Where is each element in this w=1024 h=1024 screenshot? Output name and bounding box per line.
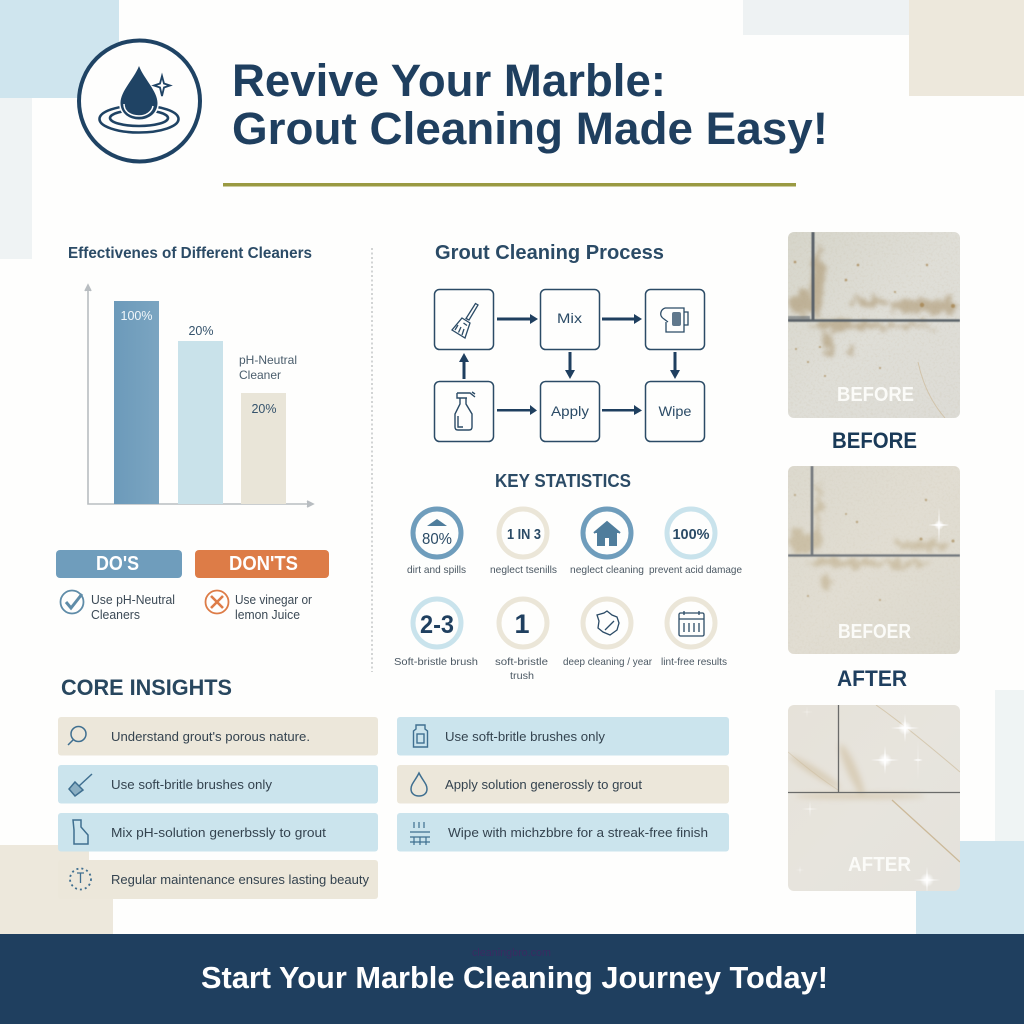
insight: soft brushes bbox=[397, 717, 729, 756]
insight: apply solution bbox=[397, 765, 729, 804]
insight: soft brushes: Use soft-britle brushes only bbox=[111, 777, 273, 792]
insight: mix solution: Mix pH-solution generbssly to grout bbox=[111, 825, 326, 840]
heading: grout cleaning process: Grout Cleaning Process bbox=[435, 242, 664, 264]
stat: sponge icon, deep cleaning per year: deep cleaning / year bbox=[563, 656, 652, 668]
stat: 2-3 soft-bristle brush: 2-3 bbox=[420, 611, 454, 639]
stat: 1 soft-bristle trush: soft-bristle bbox=[495, 656, 548, 668]
step: brush bbox=[434, 290, 494, 350]
call to action: Start Your Marble Cleaning Journey Today! bbox=[201, 960, 828, 995]
step: Mix bbox=[540, 290, 600, 350]
insight: mix solution bbox=[58, 813, 378, 852]
bar: pH-Neutral Cleaner 20%: pH-Neutral bbox=[239, 353, 297, 367]
insight: regular maintenance bbox=[58, 860, 378, 899]
icon: check bbox=[60, 590, 84, 614]
source url: cleaningbro.com bbox=[472, 947, 551, 959]
bar: 100% bbox=[114, 301, 159, 504]
title bbox=[232, 55, 828, 154]
icon: cross bbox=[206, 590, 228, 614]
header logo: water drop with sparkle bbox=[79, 40, 200, 162]
title underline bbox=[223, 183, 796, 186]
bar chart: effectiveness of cleaners bbox=[68, 245, 313, 507]
heading: key statistics: KEY STATISTICS bbox=[495, 471, 631, 491]
stat: 80% dirt and spills: 80% bbox=[422, 531, 452, 548]
step: spray bottle bbox=[434, 382, 494, 442]
step: Wipe: Wipe bbox=[658, 403, 692, 419]
heading: after: AFTER bbox=[837, 666, 907, 691]
don't text: lemon Juice bbox=[235, 608, 300, 622]
process flow diagram bbox=[434, 290, 704, 442]
bar: 100%: 100% bbox=[121, 309, 152, 323]
bar: pH-Neutral Cleaner 20% bbox=[239, 353, 297, 504]
don't text: Use vinegar or bbox=[235, 593, 312, 607]
heading: core insights: CORE INSIGHTS bbox=[61, 675, 232, 700]
bar: pH-Neutral Cleaner 20%: Cleaner bbox=[239, 368, 281, 382]
photo caption: AFTER bbox=[848, 854, 912, 876]
stat: calendar icon, lint-free results bbox=[661, 599, 727, 668]
don't text bbox=[235, 593, 312, 622]
footer banner bbox=[0, 934, 1024, 1024]
stat: 100% prevent acid damage: 100% bbox=[672, 526, 710, 543]
stat: 80% dirt and spills: dirt and spills bbox=[407, 564, 466, 576]
heading: before: BEFORE bbox=[832, 428, 917, 453]
stat: sponge icon, deep cleaning per year bbox=[563, 599, 652, 668]
don'ts badge: DON'TS bbox=[229, 553, 298, 575]
stat: 100% prevent acid damage: prevent acid damage bbox=[649, 564, 742, 576]
insight: soft brushes: Use soft-britle brushes only bbox=[445, 729, 606, 744]
do's column bbox=[56, 550, 182, 622]
stat: 1 soft-bristle trush bbox=[495, 599, 548, 682]
stat: 2-3 soft-bristle brush bbox=[394, 599, 478, 668]
stat: 1 soft-bristle trush: trush bbox=[510, 670, 534, 682]
photo caption: BEFORE bbox=[837, 384, 914, 406]
photo: mid-clean marble bbox=[788, 466, 960, 654]
title: Grout Cleaning Made Easy! bbox=[232, 103, 828, 154]
bar: 20%: 20% bbox=[188, 324, 214, 338]
key statistics grid bbox=[394, 509, 742, 682]
stat: calendar icon, lint-free results: lint-free results bbox=[661, 656, 727, 668]
core insights, left column bbox=[58, 717, 378, 899]
step: Mix: Mix bbox=[557, 310, 582, 326]
step: Wipe bbox=[646, 382, 704, 442]
don'ts column bbox=[195, 550, 329, 622]
chart title: Effectivenes of Different Cleaners bbox=[68, 245, 312, 262]
core insights, right column bbox=[397, 717, 729, 852]
step: Apply: Apply bbox=[551, 403, 589, 419]
stat: 80% dirt and spills bbox=[407, 509, 466, 576]
insight: wipe with microfibre bbox=[397, 813, 729, 852]
arrows bbox=[459, 314, 680, 415]
insight: apply solution: Apply solution generossly to grout bbox=[445, 777, 642, 792]
stat: 1 soft-bristle trush: 1 bbox=[514, 609, 530, 639]
stat: 1 in 3: 1 IN 3 bbox=[507, 526, 541, 543]
stat: 1 in 3: neglect tsenills bbox=[490, 564, 557, 576]
stat: house icon, neglect cleaning: neglect cleaning bbox=[570, 564, 644, 576]
do text bbox=[91, 593, 175, 622]
bar: pH-Neutral Cleaner 20%: 20% bbox=[251, 402, 277, 416]
stat: 2-3 soft-bristle brush: Soft-bristle brush bbox=[394, 656, 478, 668]
title: Revive Your Marble: bbox=[232, 55, 666, 106]
insight: wipe with microfibre: Wipe with michzbbre for a streak-free finish bbox=[448, 825, 708, 840]
photo: after, clean sparkling marble bbox=[787, 705, 960, 893]
axes bbox=[85, 285, 313, 507]
photo: before, heavily stained marble bbox=[788, 232, 960, 418]
step: Apply bbox=[540, 382, 600, 442]
insight: porous nature bbox=[58, 717, 378, 756]
do text: Use pH-Neutral bbox=[91, 593, 175, 607]
do's badge: DO'S bbox=[96, 553, 139, 575]
do text: Cleaners bbox=[91, 608, 140, 622]
stat: 1 in 3 bbox=[490, 509, 557, 576]
stat: 100% prevent acid damage bbox=[649, 509, 742, 576]
step: sponge and bucket icon bbox=[646, 290, 704, 350]
insight: soft brushes bbox=[58, 765, 378, 804]
stat: house icon, neglect cleaning bbox=[570, 509, 644, 576]
photo caption: BEFOER bbox=[838, 621, 911, 643]
insight: regular maintenance: Regular maintenance ensures lasting beauty bbox=[111, 872, 369, 887]
insight: porous nature: Understand grout's porous nature. bbox=[111, 729, 310, 744]
bar: 20% bbox=[178, 324, 223, 504]
